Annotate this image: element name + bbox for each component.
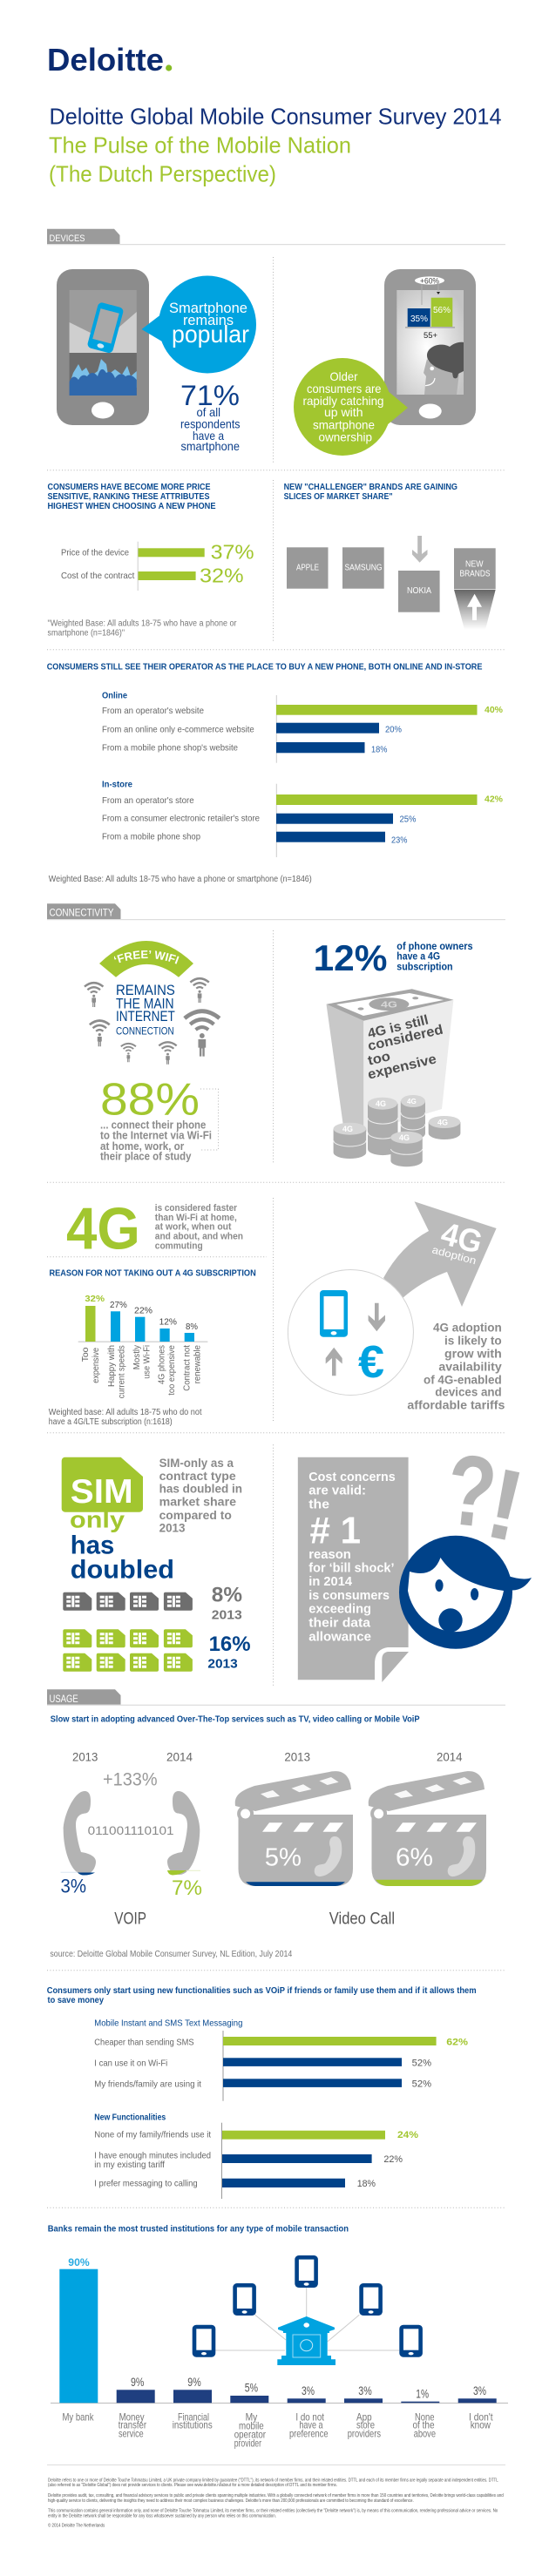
bar chart: trusted institutions: 3% (473, 2383, 486, 2397)
heading (47, 1985, 477, 2005)
bar chart: trusted institutions: 3% (302, 2383, 315, 2397)
callout: cost concerns: the (308, 1498, 329, 1512)
bar chart: trusted institutions: institutions (173, 2419, 213, 2431)
text: 4G adoption likely to grow: is likely to (444, 1333, 502, 1347)
icon: bank with connected phones (193, 2255, 423, 2365)
bar chart: reasons: Too (81, 1347, 91, 1362)
callout: cost concerns (298, 1457, 409, 1682)
bar chart: trusted institutions: preference (289, 2428, 329, 2440)
icon: banknote stack: 4G is still (366, 1012, 430, 1042)
bar chart: trusted institutions: above (414, 2428, 436, 2440)
bar chart: price attributes: 37% (211, 541, 254, 564)
panel: older consumers catching up (294, 269, 476, 456)
panel: video call: 2014 (437, 1750, 463, 1764)
bar chart: messaging (94, 2018, 468, 2101)
callout: cost concerns: exceeding (308, 1602, 371, 1617)
bar chart: in-store: From an operator's store (102, 795, 194, 806)
bar chart: reasons: 8% (186, 1322, 198, 1332)
bar chart: trusted institutions: Financial (178, 2410, 209, 2423)
panel: banks most trusted (48, 2224, 508, 2449)
callout: cost concerns: allowance (308, 1629, 371, 1644)
bar chart: price attributes: Cost of the contract (61, 571, 134, 581)
bar chart: trusted institutions: None (415, 2410, 435, 2423)
section tab: connectivity (47, 903, 505, 920)
bar chart: in-store: In-store (102, 779, 132, 789)
bar chart: new functionalities: 18% (357, 2179, 376, 2189)
section tab: usage (47, 1689, 505, 1706)
bar chart: trusted institutions: operator (234, 2428, 266, 2440)
panel: reasons for not taking 4G (49, 1268, 256, 1427)
icon: phone with crowd (57, 269, 149, 425)
diagram: brand boxes: BRANDS (460, 569, 491, 578)
stat: 88%: at home, work, or (100, 1140, 184, 1153)
panel: VOIP: 3% (61, 1876, 86, 1897)
footer: legal text: entity in the Deloitte network shall be responsible for any loss whatsoever sustained by any person who relies on this communication. (48, 2513, 276, 2519)
bar chart: new functionalities: 24% (397, 2130, 418, 2140)
stat: 12%: have a 4G (396, 950, 440, 963)
source note: source: Deloitte Global Mobile Consumer Survey, NL Edition, July 2014 (50, 1949, 292, 1959)
callout: older consumers: consumers are (307, 382, 382, 396)
bar chart: trusted institutions: Money (119, 2410, 145, 2423)
bar chart: messaging: I can use it on Wi-Fi (94, 2059, 167, 2069)
bar chart: trusted institutions: I don't (469, 2410, 493, 2423)
callout: cost concerns: their data (308, 1615, 371, 1630)
bar chart: online: 18% (371, 745, 387, 754)
text: 4G adoption likely to grow: 4G adoption (433, 1320, 502, 1334)
diagram: brand boxes: SAMSUNG (345, 563, 383, 572)
icon: shocked face (399, 1536, 532, 1649)
heading (47, 482, 216, 511)
bar chart: trusted institutions: 3% (358, 2383, 372, 2397)
bar chart: reasons: use Wi-Fi (143, 1345, 152, 1379)
text: remains the main internet connection: CONNECTION (116, 1024, 174, 1037)
title: The Pulse of the Mobile Nation (49, 132, 351, 159)
heading: REASON FOR NOT TAKING OUT A 4G SUBSCRIPTION (49, 1268, 256, 1279)
bar chart: in-store: 42% (485, 795, 503, 805)
bar chart: trusted institutions: 5% (245, 2381, 258, 2395)
bar chart: trusted institutions: 9% (131, 2375, 144, 2389)
heading: Consumers only start using new functionalities such as VOiP if friends or family use them and if it allows them (47, 1985, 477, 1996)
stat: 71% of all respondents have a smartphone (180, 380, 241, 453)
stat: 71% of all respondents have a smartphone: have a (193, 429, 224, 443)
bar chart: reasons: 32% (85, 1294, 105, 1304)
panel: SIM only has doubled (62, 1456, 251, 1672)
text: only has doubled: only (70, 1506, 125, 1532)
text: remains the main internet connection: INTERNET (116, 1008, 175, 1024)
panel: VOIP: VOIP (114, 1910, 146, 1928)
heading: CONSUMERS STILL SEE THEIR OPERATOR AS THE PLACE TO BUY A NEW PHONE, BOTH ONLINE AND IN-STORE (47, 661, 482, 672)
stat: 88%: 88% (100, 1074, 200, 1125)
heading: Banks remain the most trusted institutions for any type of mobile transaction (48, 2224, 349, 2235)
bar chart: price attributes: Price of the device (61, 547, 129, 558)
text: remains the main internet connection (116, 982, 175, 1037)
bar chart: online: From an operator's website (102, 706, 204, 716)
bar chart: reasons: renewable (193, 1345, 202, 1383)
icon: clapperboard 2013: 5% (265, 1844, 302, 1872)
bar chart: trusted institutions: have a (299, 2419, 323, 2431)
heading: CONSUMERS HAVE BECOME MORE PRICE (47, 482, 211, 492)
icon: handsets (61, 1791, 200, 1875)
bar chart: price attributes: 32% (200, 565, 244, 587)
pictogram: SIM share 2013 (63, 1583, 242, 1622)
panel: 4G too expensive (314, 937, 473, 1166)
footnote (49, 1408, 202, 1427)
stat: 71% of all respondents have a smartphone: respondents (180, 417, 241, 431)
panel: free wifi (84, 941, 221, 1163)
icon: punctuation: ! (478, 1447, 533, 1563)
callout: smartphone remains popular: popular (172, 321, 249, 348)
icon: phone with 55+ chart (384, 269, 476, 425)
bar chart: online: From an online only e-commerce website (102, 724, 254, 734)
bar chart: in-store: From a mobile phone shop (102, 831, 200, 842)
callout: cost concerns: # 1 (310, 1510, 361, 1552)
text: 4G adoption likely to grow: affordable tariffs (407, 1398, 505, 1412)
stat: 12%: subscription (396, 960, 453, 972)
title: (The Dutch Perspective) (49, 161, 276, 187)
bar chart: trusted institutions: 90% (68, 2256, 90, 2268)
text: 4G adoption likely to grow: grow with (444, 1346, 502, 1360)
bar chart: online: From a mobile phone shop's website (102, 743, 238, 754)
bar chart: reasons: Happy with (107, 1345, 117, 1387)
bar chart: messaging: Mobile Instant and SMS Text Messaging (94, 2018, 243, 2029)
panel: VOIP (61, 1750, 202, 1928)
stat: 12% (314, 937, 473, 978)
icon: 4G coins (334, 1095, 460, 1166)
pictogram: SIM share 2014: 16% (209, 1633, 251, 1656)
stat: 71% of all respondents have a smartphone: of all (197, 405, 220, 419)
callout: cost concerns: in 2014 (308, 1574, 353, 1589)
bar chart: trusted institutions: My (246, 2410, 257, 2423)
bar chart: reasons: 4G phones (158, 1345, 167, 1384)
text: 4G adoption likely to grow: devices and (435, 1385, 502, 1399)
bar chart: reasons: 27% (110, 1300, 127, 1310)
bar chart: trusted institutions: transfer (119, 2419, 146, 2431)
icon: clapperboard 2013 (235, 1771, 353, 1886)
footer: legal text (48, 2478, 504, 2529)
bar chart: trusted institutions: 1% (416, 2387, 429, 2401)
arrow: 4G adoption: 4G (437, 1215, 486, 1261)
panel: new functionalities (47, 1985, 477, 2199)
callout: smartphone remains popular (141, 275, 256, 373)
panel: 4G faster (66, 1195, 243, 1261)
panel: where to buy (47, 661, 503, 884)
heading: SENSITIVE, RANKING THESE ATTRIBUTES (47, 491, 209, 502)
text: remains the main internet connection: THE MAIN (116, 995, 174, 1011)
footer: legal text: (also referred to as "Deloitte Global") does not provide services to clients. Please see www.deloitte.nl/about for a more detailed description of DTTL and its member firms. (48, 2483, 337, 2488)
panel: 4G faster: 4G (66, 1195, 140, 1261)
icon: circle with phone and euro: € (358, 1337, 384, 1388)
stat: 88%: their place of study (100, 1151, 191, 1163)
arrow: 4G adoption: adoption (430, 1243, 478, 1267)
bar chart: online: 40% (485, 706, 503, 715)
footnote: have a 4G/LTE subscription (n:1618) (49, 1417, 173, 1427)
panel: bill shock (298, 1434, 533, 1682)
callout: cost concerns: for ‘bill shock’ (308, 1560, 394, 1575)
section tab: usage: USAGE (49, 1693, 78, 1705)
callout: older consumers: up with (324, 405, 363, 419)
icon: phone with 55+ chart: +60% (420, 277, 439, 286)
bar chart: trusted institutions: providers (348, 2428, 381, 2440)
bar chart: trusted institutions: know (471, 2419, 491, 2431)
text: SIM-only description: SIM-only as a (159, 1456, 234, 1470)
footnote: Weighted base: All adults 18-75 who do not (49, 1408, 202, 1417)
callout: cost concerns: is consumers (308, 1588, 390, 1603)
bar chart: reasons: too expensive (167, 1345, 177, 1396)
bar chart: new functionalities: 22% (383, 2154, 403, 2165)
panel: 4G adoption (288, 1201, 505, 1412)
section tab: devices: DEVICES (49, 233, 85, 244)
pictogram: SIM share 2014: 2013 (207, 1657, 238, 1672)
callout: cost concerns: are valid: (308, 1484, 366, 1498)
callout: smartphone remains popular: Smartphone (169, 300, 247, 316)
bar chart: reasons: 22% (134, 1305, 152, 1315)
callout: older consumers: ownership (319, 430, 372, 444)
panel: video call (235, 1750, 486, 1928)
pictogram: SIM share 2013: 2013 (212, 1607, 242, 1622)
stat: 12%: 12% (314, 937, 387, 978)
panel: VOIP: 7% (172, 1876, 202, 1900)
bar chart: new functionalities: I have enough minutes included (94, 2150, 211, 2160)
section tab: connectivity: CONNECTIVITY (49, 907, 113, 919)
icon: 4G coins: 4G (342, 1125, 353, 1133)
icon: clapperboard 2014: 6% (396, 1844, 433, 1872)
diagram: brand boxes: NEW (465, 559, 484, 569)
footer: legal text: high-quality service to clients, delivering the insights they need to address their most complex business challenges. Deloitte's more than 200,000 professionals are committed to becoming the standard of excellence. (48, 2498, 414, 2504)
bar chart: reasons: current speeds (118, 1345, 127, 1398)
callout: older consumers (294, 358, 408, 456)
panel: price sensitive (47, 482, 254, 638)
icon: phone with 55+ chart: 56% (433, 306, 451, 315)
panel: smartphone remains popular (57, 269, 256, 453)
bar chart: trusted institutions: of the (413, 2419, 435, 2431)
bar chart: new functionalities: in my existing tariff (94, 2160, 165, 2170)
panel: 4G faster: is considered faster (155, 1203, 238, 1214)
callout: older consumers: smartphone (313, 418, 375, 432)
icon: phone with 55+ chart: 55+ (424, 331, 437, 341)
text: 4G adoption likely to grow: availability (438, 1359, 502, 1373)
stat: 12%: of phone owners (396, 940, 473, 952)
bar chart: reasons: 12% (159, 1317, 177, 1328)
panel: VOIP: 2013 (72, 1750, 98, 1764)
bar chart: trusted institutions: I do not (295, 2410, 325, 2423)
banner: free wifi (99, 941, 193, 977)
text: only has doubled: has (71, 1531, 114, 1559)
bar chart: reasons: Contract not (183, 1345, 193, 1391)
bar chart: online (102, 691, 503, 763)
panel: VOIP: 2014 (166, 1750, 193, 1764)
bar chart: messaging: 52% (412, 2059, 431, 2069)
icon: 4G coins: 4G (437, 1119, 448, 1127)
panel: VOIP: +133% (103, 1770, 158, 1790)
heading: NEW "CHALLENGER" BRANDS ARE GAINING (284, 482, 458, 492)
bar chart: trusted institutions: service (119, 2428, 144, 2440)
bar chart: reasons: Mostly (132, 1345, 142, 1369)
callout: smartphone remains popular: remains (183, 312, 234, 328)
icons: wifi users (85, 978, 220, 1065)
bar chart: trusted institutions: provider (234, 2437, 261, 2449)
footnote: smartphone (n=1846)" (47, 628, 125, 638)
bar chart: messaging: Cheaper than sending SMS (94, 2038, 194, 2048)
bar chart: in-store: From a consumer electronic retailer's store (102, 814, 260, 824)
bar chart: in-store: 25% (399, 815, 417, 824)
icon: banknote stack: expensive (366, 1051, 438, 1083)
bar chart: new functionalities (94, 2112, 418, 2199)
panel: 4G faster: than Wi-Fi at home, (155, 1213, 237, 1223)
icon: circle with phone and euro (288, 1270, 413, 1396)
heading (284, 482, 458, 502)
bar chart: trusted institutions: My bank (63, 2410, 94, 2423)
text: SIM-only description (159, 1456, 242, 1534)
bar chart: messaging: My friends/family are using it (94, 2079, 201, 2090)
callout: cost concerns: reason (308, 1547, 351, 1562)
panel: VOIP: 011001110101 (88, 1823, 174, 1837)
icon: banknote stack: too (366, 1049, 392, 1069)
callout: cost concerns: Cost concerns (308, 1470, 396, 1484)
pictogram: SIM share 2013: 8% (212, 1583, 242, 1606)
icon: punctuation: ? (441, 1434, 501, 1550)
bar chart: new functionalities: None of my family/friends use it (94, 2129, 211, 2140)
bar chart: online: 20% (385, 726, 402, 735)
text: only has doubled (70, 1506, 174, 1585)
bar chart: in-store (102, 779, 503, 857)
footnote (47, 619, 237, 638)
bar chart: messaging: 52% (412, 2079, 431, 2090)
text: SIM-only description: compared to (159, 1508, 232, 1522)
heading: slow start: Slow start in adopting advanced Over-The-Top services such as TV, video calling or Mobile VoiP (51, 1714, 420, 1724)
title: Deloitte Global Mobile Consumer Survey 2014 (49, 103, 502, 129)
stat: 88% (100, 1074, 218, 1163)
bar chart: messaging: 62% (446, 2037, 468, 2047)
icon: banknote stack: considered (366, 1023, 444, 1054)
bar chart: trusted institutions (51, 2256, 508, 2449)
panel: 4G faster: at work, when out (155, 1222, 232, 1233)
stat: 71% of all respondents have a smartphone: smartphone (181, 439, 240, 453)
icon: 4G coins: 4G (407, 1098, 417, 1105)
text: SIM-only description: has doubled in (159, 1481, 242, 1495)
heading: SLICES OF MARKET SHARE" (284, 491, 393, 502)
icon: 4G coins: 4G (399, 1133, 410, 1142)
bar chart: trusted institutions: App (356, 2410, 372, 2423)
panel: challenger brands (284, 482, 496, 630)
callout: older consumers: Older (329, 369, 358, 383)
text: only has doubled: doubled (71, 1556, 174, 1585)
text: remains the main internet connection: REMAINS (116, 982, 175, 998)
arrow: 4G adoption (383, 1201, 497, 1307)
bar chart: in-store: 23% (391, 835, 407, 845)
bar chart: trusted institutions: 9% (187, 2375, 201, 2389)
diagram: brand boxes: NOKIA (407, 586, 431, 596)
bar chart: trusted institutions: store (356, 2419, 375, 2431)
bar chart: reasons (78, 1294, 207, 1398)
panel: 4G faster: and about, and when (155, 1232, 243, 1242)
text: SIM-only description: 2013 (159, 1520, 186, 1534)
panel: video call: 2013 (284, 1750, 310, 1764)
bar chart: new functionalities: New Functionalities (94, 2112, 166, 2122)
diagram: brand boxes (287, 536, 496, 630)
title (49, 103, 502, 187)
bar chart: trusted institutions: mobile (239, 2419, 264, 2431)
footer: legal text: © 2014 Deloitte The Netherlands (48, 2523, 105, 2529)
banner: free wifi: ‘FREE’ WIFI (113, 950, 180, 964)
icon: clapperboard 2014 (369, 1771, 486, 1886)
heading: to save money (47, 1995, 104, 2005)
bar chart: price attributes (61, 541, 254, 591)
icon: banknote stack (326, 989, 453, 1132)
text: SIM-only description: market share (159, 1495, 236, 1509)
icon: phone with 55+ chart: 35% (410, 314, 428, 324)
icon: SIM card: SIM (71, 1473, 133, 1511)
text: 4G adoption likely to grow: of 4G-enabled (424, 1372, 502, 1386)
footnote: Weighted Base: All adults 18-75 who have a phone or smartphone (n=1846) (49, 875, 312, 884)
text: 4G adoption likely to grow (407, 1320, 505, 1412)
icon: SIM card (62, 1457, 143, 1512)
pictogram: SIM share 2014 (63, 1629, 251, 1672)
text: SIM-only description: contract type (159, 1469, 236, 1483)
diagram: brand boxes: APPLE (296, 563, 319, 572)
heading: HIGHEST WHEN CHOOSING A NEW PHONE (47, 501, 216, 511)
bar chart: new functionalities: I prefer messaging to calling (94, 2178, 198, 2188)
callout: older consumers: rapidly catching (303, 394, 383, 408)
bar chart: reasons: expensive (92, 1348, 101, 1383)
footnote: "Weighted Base: All adults 18-75 who have a phone or (47, 619, 237, 628)
bar chart: online: Online (102, 691, 127, 701)
icon: banknote stack: 4G (381, 1000, 397, 1011)
stat: 88%: ... connect their phone (100, 1119, 206, 1131)
stat: 71% of all respondents have a smartphone: 71% (180, 380, 240, 411)
stat: 88%: to the Internet via Wi-Fi (100, 1130, 212, 1142)
panel: 4G faster: commuting (155, 1241, 203, 1251)
logo: Deloitte: Deloitte (47, 42, 164, 78)
icon: 4G coins: 4G (376, 1099, 386, 1108)
panel: video call: Video Call (329, 1910, 395, 1928)
section tab: devices (47, 229, 505, 245)
